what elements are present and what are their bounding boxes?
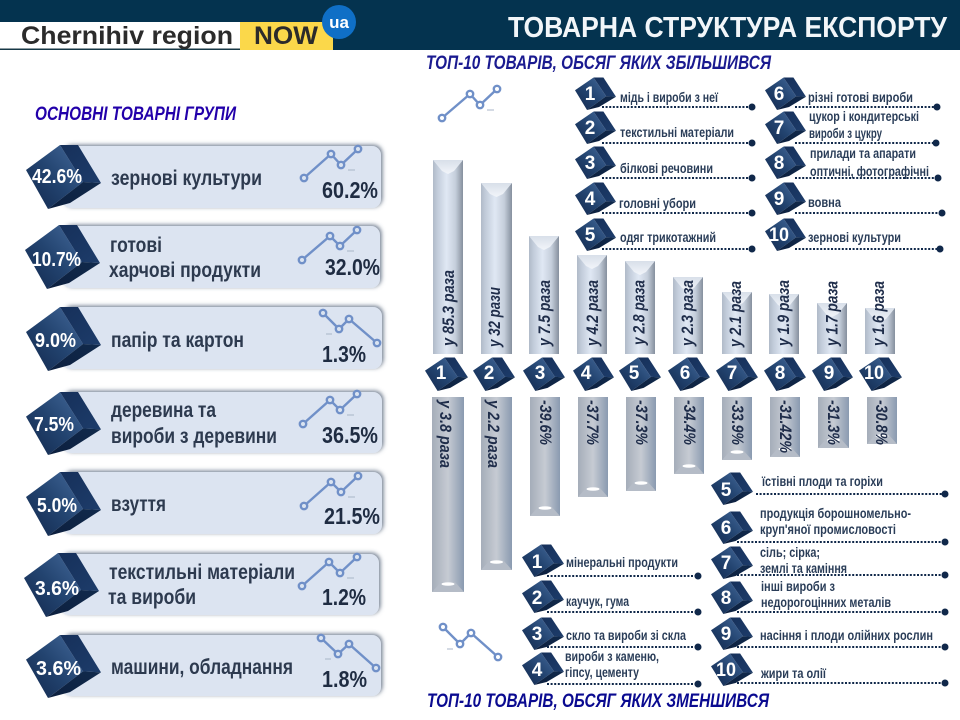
item 7 [765, 109, 940, 146]
item 9 [711, 618, 948, 650]
panel: footwear: 5.0% [37, 495, 77, 517]
item 2: текстильні матеріали [620, 125, 734, 140]
item 10 [711, 654, 948, 686]
item 10: жири та олії [760, 666, 827, 681]
logo badge: ua [322, 5, 356, 39]
icon: rising sparkline [299, 554, 360, 589]
item 6 [765, 78, 940, 110]
panel: machinery and equipment: 3.6% [36, 658, 81, 680]
panel: textile materials: 1.2% [322, 584, 366, 610]
bar 3 [529, 236, 559, 354]
legend: decreased goods, column 1 [522, 545, 702, 688]
bar 6: -34.4% [680, 400, 698, 445]
bar 9 [817, 281, 847, 354]
cube 4: 4 [581, 363, 592, 384]
item 7: 7 [721, 553, 731, 574]
item 3: 3 [585, 153, 595, 174]
bar 6 [673, 277, 703, 354]
cube 1 [425, 358, 468, 391]
item 10: зернові культури [808, 230, 901, 245]
item 9 [765, 183, 946, 216]
cube 1: 1 [436, 363, 447, 384]
bar 4: -37.7% [583, 400, 601, 445]
logo badge: ua: ua [329, 13, 349, 32]
bar 1 [432, 397, 464, 592]
item 8: 8 [721, 588, 731, 609]
item 4: вироби з каменю, [565, 649, 659, 664]
cube 6: 6 [680, 363, 690, 384]
item 5: 5 [721, 480, 732, 501]
panel: wood and wood products [26, 391, 382, 455]
item 1: мінеральні продукти [566, 555, 678, 570]
item 7: вироби з цукру [809, 126, 882, 141]
item 7 [711, 545, 948, 579]
bar 8 [770, 397, 800, 457]
cube 10 [859, 358, 902, 391]
bar 4 [577, 255, 607, 354]
panel: grain crops: зернові культури [111, 167, 262, 190]
panel: wood and wood products: деревина та [111, 399, 216, 422]
item 1 [522, 545, 702, 580]
item 6: 6 [774, 84, 784, 105]
panel: paper and cardboard [26, 307, 382, 371]
panel: footwear: 21.5% [324, 503, 380, 529]
icon: rising sparkline [301, 146, 361, 181]
panel: wood and wood products: 36.5% [322, 422, 378, 448]
panel: textile materials: текстильні матеріали [109, 561, 295, 584]
item 5: одяг трикотажний [620, 230, 716, 245]
cube 2: 2 [484, 363, 494, 384]
bar 7 [722, 397, 752, 460]
item 8: прилади та апарати [810, 146, 916, 161]
heading: top-10 decreased: ТОП-10 ТОВАРІВ, ОБСЯГ ЯКИХ ЗМЕНШИВСЯ [427, 691, 770, 712]
item 1 [575, 78, 756, 110]
cube 5 [619, 358, 661, 391]
cube 3 [523, 358, 565, 391]
item 5 [575, 219, 756, 252]
item 1: 1 [585, 84, 596, 105]
numbered cubes: middle row [425, 358, 902, 391]
item 3 [522, 618, 702, 650]
bar 2 [481, 183, 512, 354]
item 8: інші вироби з [761, 579, 835, 594]
chart: lower bars, decline [432, 397, 897, 592]
panel: ready food products: готові [110, 234, 162, 257]
panel: ready food products: 32.0% [325, 254, 380, 280]
bar 9 [818, 397, 849, 448]
item 8 [711, 579, 948, 616]
legend: increased goods, column 2 [765, 78, 946, 252]
item 10 [765, 219, 944, 252]
panel: ready food products: харчові продукти [109, 259, 261, 282]
bar 8 [769, 280, 799, 354]
bar 7: -33.9% [728, 400, 746, 445]
cube 8 [764, 358, 806, 391]
bar 2 [481, 397, 512, 570]
cube 8: 8 [775, 363, 785, 384]
icon: rising sparkline [300, 391, 360, 427]
icon: large rising sparkline [439, 86, 500, 121]
item 2: 2 [585, 118, 595, 139]
panel: paper and cardboard: папір та картон [111, 329, 244, 352]
item 6: продукція борошномельно- [760, 506, 911, 521]
cube 2 [473, 358, 515, 391]
bar 2: у 2.2 раза [484, 399, 502, 468]
panel: grain crops: 42.6% [32, 166, 82, 188]
cube 6 [668, 358, 710, 391]
item 2: 2 [532, 588, 542, 609]
header band [0, 0, 960, 50]
bar 3: -39.6% [536, 400, 554, 445]
panel: textile materials [24, 553, 379, 617]
bar 5 [625, 261, 655, 354]
item 4 [522, 649, 702, 688]
item 6: 6 [721, 518, 731, 539]
panel: textile materials: та вироби [108, 586, 196, 609]
icon: large falling sparkline [440, 624, 501, 660]
panel: textile materials: 3.6% [35, 578, 79, 600]
panel: machinery and equipment: машини, обладнання [111, 656, 293, 679]
item 6: круп'яної промисловості [760, 522, 896, 537]
panel: ready food products [25, 225, 380, 289]
heading: top-10 increased: ТОП-10 ТОВАРІВ, ОБСЯГ ЯКИХ ЗБІЛЬШИВСЯ [426, 53, 772, 74]
cube 7: 7 [727, 363, 737, 384]
bar 7 [722, 281, 752, 354]
panel: footwear: взуття [111, 493, 166, 516]
item 7: сіль; сірка; [760, 545, 820, 560]
bar 3: у 7.5 раза [536, 280, 554, 347]
cube 3: 3 [535, 363, 545, 384]
bar 1 [433, 160, 463, 354]
item 9: 9 [721, 624, 731, 645]
cube 9: 9 [824, 363, 834, 384]
panel: footwear [26, 472, 382, 536]
panel: machinery and equipment: 1.8% [322, 666, 367, 692]
item 2 [575, 112, 756, 146]
bar 9: -31.3% [824, 400, 842, 445]
panel: grain crops: 60.2% [322, 177, 378, 203]
bar 8: у 1.9 раза [775, 280, 793, 347]
panel: paper and cardboard: 9.0% [35, 330, 76, 352]
logo text: Chernihiv region: Chernihiv region [21, 22, 233, 50]
bar 5 [626, 397, 656, 491]
item 9: вовна [808, 195, 841, 210]
bar 10: -30.8% [872, 400, 890, 445]
logo text: NOW: NOW [254, 22, 318, 50]
bar 8: -31.42% [776, 400, 794, 453]
bar 6: у 2.3 раза [679, 280, 697, 347]
panel: wood and wood products: 7.5% [34, 414, 74, 436]
legend: increased goods, column 1 [575, 78, 756, 252]
item 10: 10 [716, 660, 736, 681]
bar 6 [674, 397, 704, 474]
icon: rising sparkline [299, 227, 360, 263]
panel: wood and wood products: вироби з деревини [111, 425, 277, 448]
bar 2: у 32 рази [486, 287, 504, 348]
chart: upper bars, growth [433, 160, 895, 354]
bar 7: у 2.1 раза [727, 281, 745, 348]
panel: paper and cardboard: 1.3% [322, 341, 366, 367]
icon: falling sparkline [318, 635, 379, 671]
item 9: 9 [774, 189, 784, 210]
item 6 [711, 506, 948, 546]
item 2 [522, 581, 702, 616]
cube 9 [812, 358, 853, 391]
panel: machinery and equipment [26, 635, 381, 698]
item 3: 3 [532, 624, 542, 645]
item 2: каучук, гума [566, 594, 629, 609]
bar 3 [530, 397, 560, 516]
cube 5: 5 [629, 363, 640, 384]
bar 5: -37.3% [632, 400, 650, 445]
item 4 [575, 183, 756, 216]
bar 9: у 1.7 раза [824, 281, 842, 347]
item 5 [711, 473, 948, 505]
item 10: 10 [769, 225, 789, 246]
item 8 [765, 146, 942, 182]
legend: decreased goods, column 2 [711, 473, 948, 686]
panel: ready food products: 10.7% [32, 249, 81, 271]
item 1: 1 [532, 552, 543, 573]
item 8: оптичні, фотографічні [810, 164, 929, 179]
cube 10: 10 [864, 363, 884, 384]
heading: main commodity groups: ОСНОВНІ ТОВАРНІ ГРУПИ [35, 104, 236, 125]
item 4: головні убори [619, 196, 696, 211]
cube 4 [573, 358, 614, 391]
bar 10: у 1.6 раза [870, 281, 888, 347]
cube 7 [716, 358, 758, 391]
item 8: 8 [774, 153, 784, 174]
item 8: недорогоцінних металів [761, 595, 891, 610]
item 7: 7 [774, 118, 784, 139]
bar 4 [578, 397, 608, 497]
item 3: білкові речовини [620, 161, 713, 176]
item 7: землі та каміння [760, 561, 847, 576]
bar 10 [867, 397, 897, 445]
panel: grain crops [26, 145, 381, 209]
bar 5: у 2.8 раза [630, 280, 648, 346]
bar 1: у 85.3 раза [440, 270, 458, 347]
item 1: мідь і вироби з неї [620, 90, 719, 105]
bar 4: у 4.2 раза [584, 280, 602, 347]
item 3: скло та вироби зі скла [566, 628, 686, 643]
item 4: 4 [532, 660, 543, 681]
bar 1: у 3.8 раза [436, 399, 454, 468]
item 5: їстівні плоди та горіхи [761, 474, 883, 489]
item 4: 4 [585, 189, 596, 210]
icon: falling sparkline [320, 310, 380, 346]
item 4: гіпсу, цементу [565, 665, 639, 680]
item 6: різні готові вироби [808, 90, 913, 105]
item 3 [575, 147, 756, 182]
bar 10 [865, 281, 895, 354]
icon: rising sparkline [301, 473, 361, 509]
item 7: цукор і кондитерські [809, 109, 919, 124]
item 5: 5 [585, 225, 596, 246]
